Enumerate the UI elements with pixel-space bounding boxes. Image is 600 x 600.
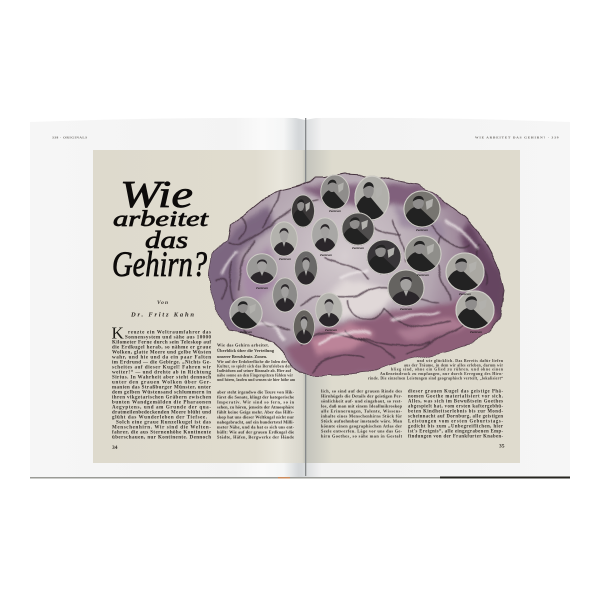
title: handwritten heading: Gehirn? [112, 244, 207, 284]
article column 4: abgespielt hat, vom ersten kaftergebhü- [408, 404, 503, 410]
article column 2: hüllt: Wie auf der grauen Erdkugel die [217, 429, 294, 434]
brain caption left: unserer Berufsleute. Zonen. [217, 354, 267, 359]
brain caption left: Individuen auf seiner Rinnsale ab. Hier auf [217, 369, 292, 373]
article column 2: Imperativ. Wir sind so fern, so in [217, 399, 295, 404]
running head left: 338 · ORIGINALS [52, 136, 88, 140]
brain caption right [368, 359, 504, 380]
brain caption left: Kultur, so spielt sich das Berufsleben der [217, 365, 291, 369]
brain caption left: Wie auf der Erdoberfläche die Inlen der [217, 360, 287, 364]
article column 3: Stück aufnehmbar imstande wäre. Man [321, 418, 403, 424]
portrait captions: Zentrum [256, 286, 268, 290]
brain caption right: und wie glücklich. Das Bereits dafür liefen [417, 359, 504, 363]
article column 2 [217, 389, 295, 439]
cream magazine panel [93, 150, 520, 463]
article column 1: Kilometer Ferne durch sein Teleskop auf [112, 340, 211, 345]
brain highlights [222, 220, 478, 345]
article column 1 [112, 324, 212, 440]
portrait captions: Zentrum [400, 307, 412, 311]
byline [130, 300, 194, 318]
article column 1: scheites auf dieser Kugel! Fahren wir [112, 365, 212, 370]
brain fold lines [215, 180, 486, 372]
article column 3: inhalte eines Menschenhirns Stück für [321, 414, 402, 418]
brain caption right: blieg sind, ohne ein Glied zu rühren. und ohne einen [391, 368, 504, 372]
article column 4: findungen von der Frankfurter Knaben- [408, 434, 503, 440]
article column 1: ihren vikgetarischen Gräbern zwischen [112, 395, 211, 400]
article column 2: Städte, Häfen, Bergwerke der Hände [217, 434, 294, 439]
article column 1: im Erdrund — die Gebirge. „Nichts Ge- [112, 360, 211, 365]
article column 2: füret die Sonate, klingt der kategorische [217, 394, 294, 399]
portrait captions: Zentrum [459, 292, 471, 296]
article column 4: gedicht bis zum „Unbegreiflichen, hier [408, 424, 503, 430]
open book page spread [30, 118, 570, 478]
article column 4: scheinnacht auf Dornburg, alle geistigen [408, 414, 503, 420]
article column 1: Wolken, glatte Meere und gelbe Wüsten [112, 350, 211, 355]
article column 1: bunten Wandgemälden die Pharaonen [112, 400, 211, 405]
article column 1: Sirius. In Wahrheit aber steht dennoch [112, 375, 211, 380]
article column 3: alle Erinnerungen, Talente, Wissens- [321, 408, 403, 414]
brain illustration [205, 174, 505, 380]
brain caption left: nähe sonne an den Fingerspitzen fühlen wir [217, 374, 293, 378]
title: handwritten heading: arbeitet [113, 206, 209, 231]
brain caption right: rinde. Die einzelnen Leistungen sind geographisch verteilt, „lokalisiert“ [368, 376, 503, 380]
article column 2: fühlt keine Geige mehr. Aber das Hilfs- [217, 409, 295, 414]
article column 4: nomen Goethe materialisiert vor sich. [408, 394, 503, 400]
portrait medallions [228, 174, 495, 346]
article column 1: reuzte ein Weltraumfahrer das [128, 330, 211, 335]
article column 2: skop hat uns dieser Weltkugel nicht nur [217, 414, 294, 419]
title: handwritten heading: das [145, 228, 188, 254]
article column 1: fahrer, die aus Sternenhöhe Kontinente [112, 430, 212, 435]
article column 1: Menschenhirn. Wir sind die Welten- [112, 425, 211, 430]
article column 3: lich, so sind auf der grauen Rinde des [321, 388, 402, 394]
article column 3 [321, 388, 403, 438]
article column 1: glüht das Wunderleben der Tiefsee. [112, 415, 208, 420]
article column 1: die Erdkugel herab, so nähme er graue [112, 345, 212, 350]
title: handwritten heading [112, 174, 209, 284]
article column 1: manien das Straßburger Münster, unter [112, 385, 212, 390]
article column 1: dratmeilenbedeckenden Meere blüht und [112, 410, 211, 415]
article column 4: dieser grauen Kugel das geistige Phä- [408, 390, 503, 394]
portrait captions: Zentrum [240, 330, 252, 334]
article column 1: weiter!“ — und drehte ab in Richtung [112, 369, 212, 375]
article column 1: K [112, 324, 124, 342]
article column 1: Aegyptens, und am Grunde der qua- [112, 405, 211, 410]
article column 4: Alles, was sich im Bewußtsein Goethes [408, 400, 503, 404]
portrait captions: Zentrum [279, 257, 291, 261]
article column 2: nahegebracht, auf ein hundertstel Milli- [217, 419, 295, 424]
article column 4: Leistungen vom ersten Geburtstags- [408, 420, 503, 424]
article column 1: unter den grauen Wolken über Ger- [112, 380, 211, 385]
title: handwritten heading: Wie [120, 174, 193, 216]
article column 3: könnte einen geographischen Atlas der [321, 424, 402, 428]
portrait captions: Zentrum [325, 328, 337, 332]
portrait captions: Zentrum [329, 209, 341, 213]
article column 3: sönlichkeit auf- und eingebaut, so rest- [321, 398, 403, 404]
byline: Von [157, 300, 168, 306]
article column 2: meter Nähe, und da hat es sich uns ent- [217, 424, 295, 429]
running head right: WIE ARBEITET DAS GEHIRN? · 339 [475, 136, 559, 140]
brain caption left: Überblick über die Verteilung [217, 348, 275, 353]
article column 2: sehen, zu hören, jenseits der Atmosphäre [217, 404, 294, 409]
article column 1: Sonnensystem und sähe aus 10000 [125, 335, 212, 340]
article column 1: dem gelben Wüstensand schlummern in [112, 390, 211, 395]
brain colour modelling [205, 185, 505, 380]
portrait captions: Zentrum [320, 253, 332, 257]
brain caption left [217, 342, 296, 382]
portrait captions [240, 209, 482, 334]
portrait captions: Zentrum [352, 246, 364, 250]
article column 1: Solch eine graue Runzelkugel ist das [116, 420, 211, 425]
article column 3: los, daß man mit einem Ideallmikroskop [321, 404, 403, 408]
portrait captions: Zentrum [416, 228, 428, 232]
article column 1: wahr, und hie und da ein paar Falten [112, 355, 211, 360]
book spine [305, 118, 306, 476]
page number 35: 35 [499, 444, 505, 450]
article column 2: aber steht irgendwo die Teure von Hik- [217, 389, 295, 394]
portrait captions: Zentrum [470, 330, 482, 334]
page number 34: 34 [112, 445, 118, 451]
brain caption left: und hören, laufen und sensen sie hier höhe am [217, 378, 296, 382]
article column 4 [408, 390, 503, 440]
article column 4: beten Kindheitserlebnis bis zur Mond- [408, 410, 503, 414]
article column 4: ist's Ereignis“, alle eingegrabenen Emp- [408, 428, 503, 434]
article column 3: hirn Goethes, so sähe man in Gestalt [321, 434, 403, 438]
brain caption right: aus der Träume, in dem wir alles erleben, darum wir [404, 363, 503, 367]
byline: Dr. Fritz Kahn [130, 312, 194, 318]
article column 3: Seele entwerfen. Läge vor uns das Ge- [321, 428, 403, 434]
article column 1: überschauen, nur Kontinente. Dennoch [112, 435, 211, 440]
brain caption left: Wie das Gehirn arbeitet. [217, 342, 269, 348]
article column 3: Hirnhügels die Details der geistigen Per- [321, 394, 403, 398]
portrait captions: Zentrum [417, 273, 429, 277]
brain caption right: Außeneindruck zu empfangen, nur durch Erregung des Hirn- [380, 372, 504, 376]
